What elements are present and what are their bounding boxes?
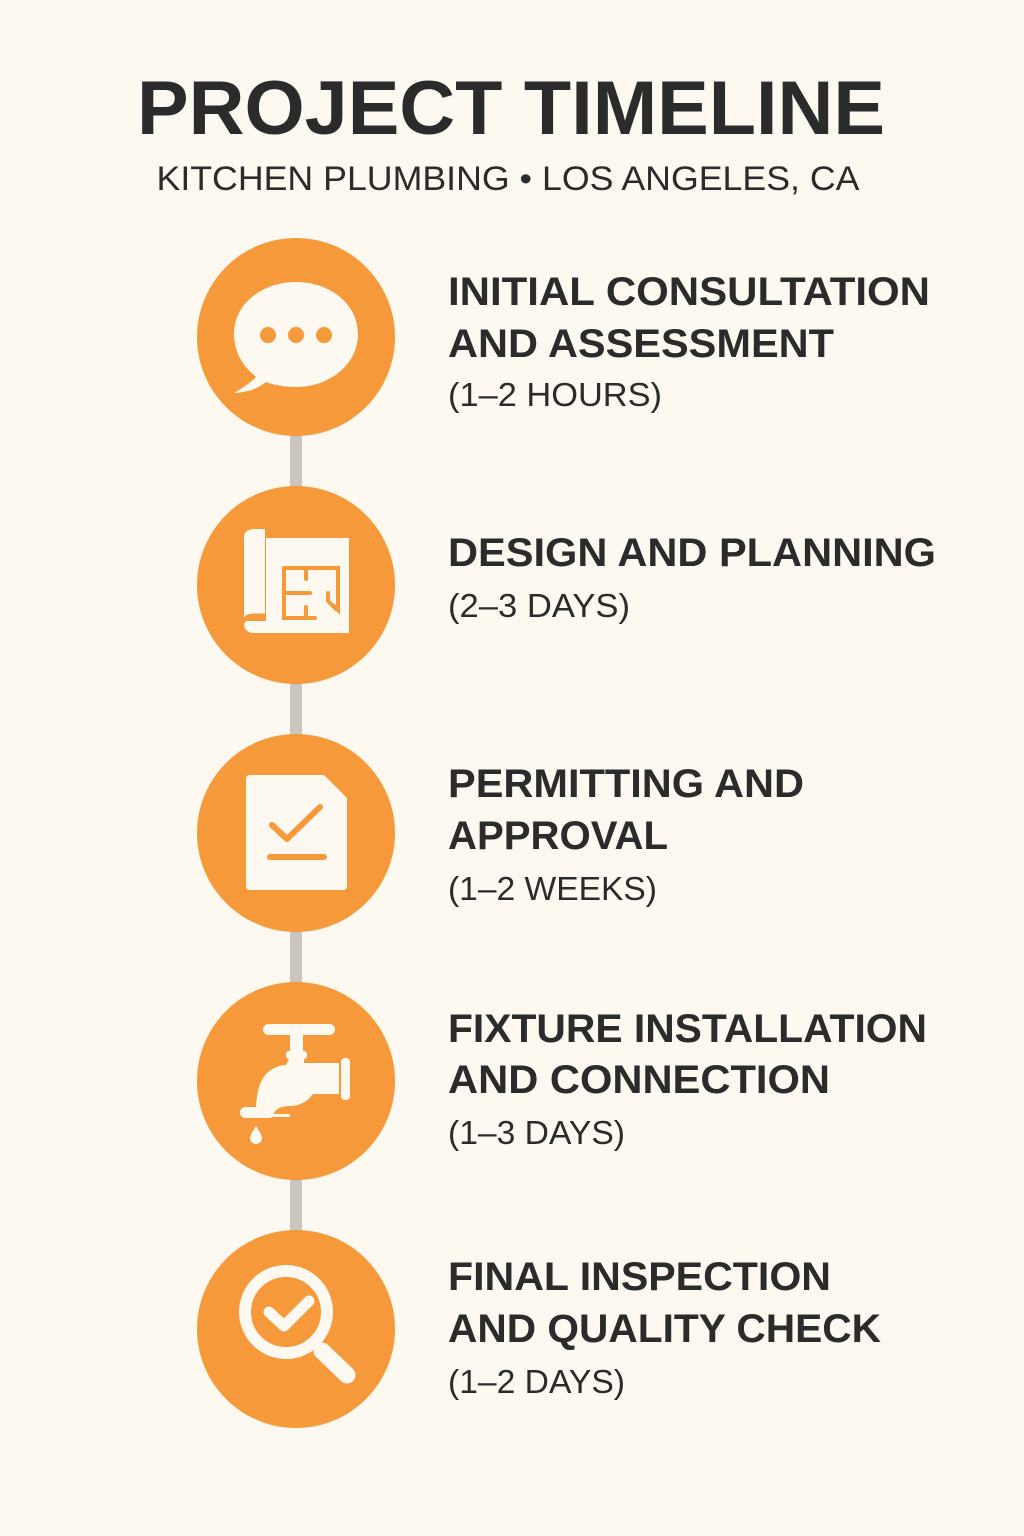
step 4: fixture <box>197 982 927 1180</box>
icon: chat bubble <box>197 238 395 436</box>
text: step 4: AND CONNECTION <box>448 1058 830 1102</box>
text: step 2 <box>448 531 936 624</box>
text: step 1: (1–2 HOURS) <box>448 376 662 413</box>
subtitle: KITCHEN PLUMBING • LOS ANGELES, CA <box>156 160 860 198</box>
icon: blueprint <box>197 486 395 684</box>
text: step 4: FIXTURE INSTALLATION <box>448 1007 927 1051</box>
text: step 3: PERMITTING AND <box>448 762 804 806</box>
title: PROJECT TIMELINE <box>137 66 885 151</box>
connector line <box>290 420 302 1250</box>
step 2: design <box>197 486 936 684</box>
text: step 4: (1–3 DAYS) <box>448 1114 625 1151</box>
text: step 2: DESIGN AND PLANNING <box>448 531 936 575</box>
text: step 5 <box>448 1255 881 1400</box>
text: step 5: (1–2 DAYS) <box>448 1363 625 1400</box>
text: step 3 <box>448 762 804 907</box>
text: step 1 <box>448 270 930 413</box>
text: step 3: APPROVAL <box>448 814 668 858</box>
text: step 5: AND QUALITY CHECK <box>448 1307 881 1351</box>
text: step 4 <box>448 1007 927 1151</box>
text: step 1: INITIAL CONSULTATION <box>448 270 930 314</box>
text: step 3: (1–2 WEEKS) <box>448 870 657 907</box>
step 5: inspection <box>197 1230 881 1428</box>
step 1: consultation <box>197 238 930 436</box>
text: step 1: AND ASSESSMENT <box>448 322 834 366</box>
step 3: permitting <box>197 734 804 932</box>
icon: document with check <box>197 734 395 932</box>
text: step 2: (2–3 DAYS) <box>448 587 630 624</box>
icon: faucet <box>197 982 395 1180</box>
text: step 5: FINAL INSPECTION <box>448 1255 831 1299</box>
icon: magnifier with check <box>197 1230 395 1428</box>
